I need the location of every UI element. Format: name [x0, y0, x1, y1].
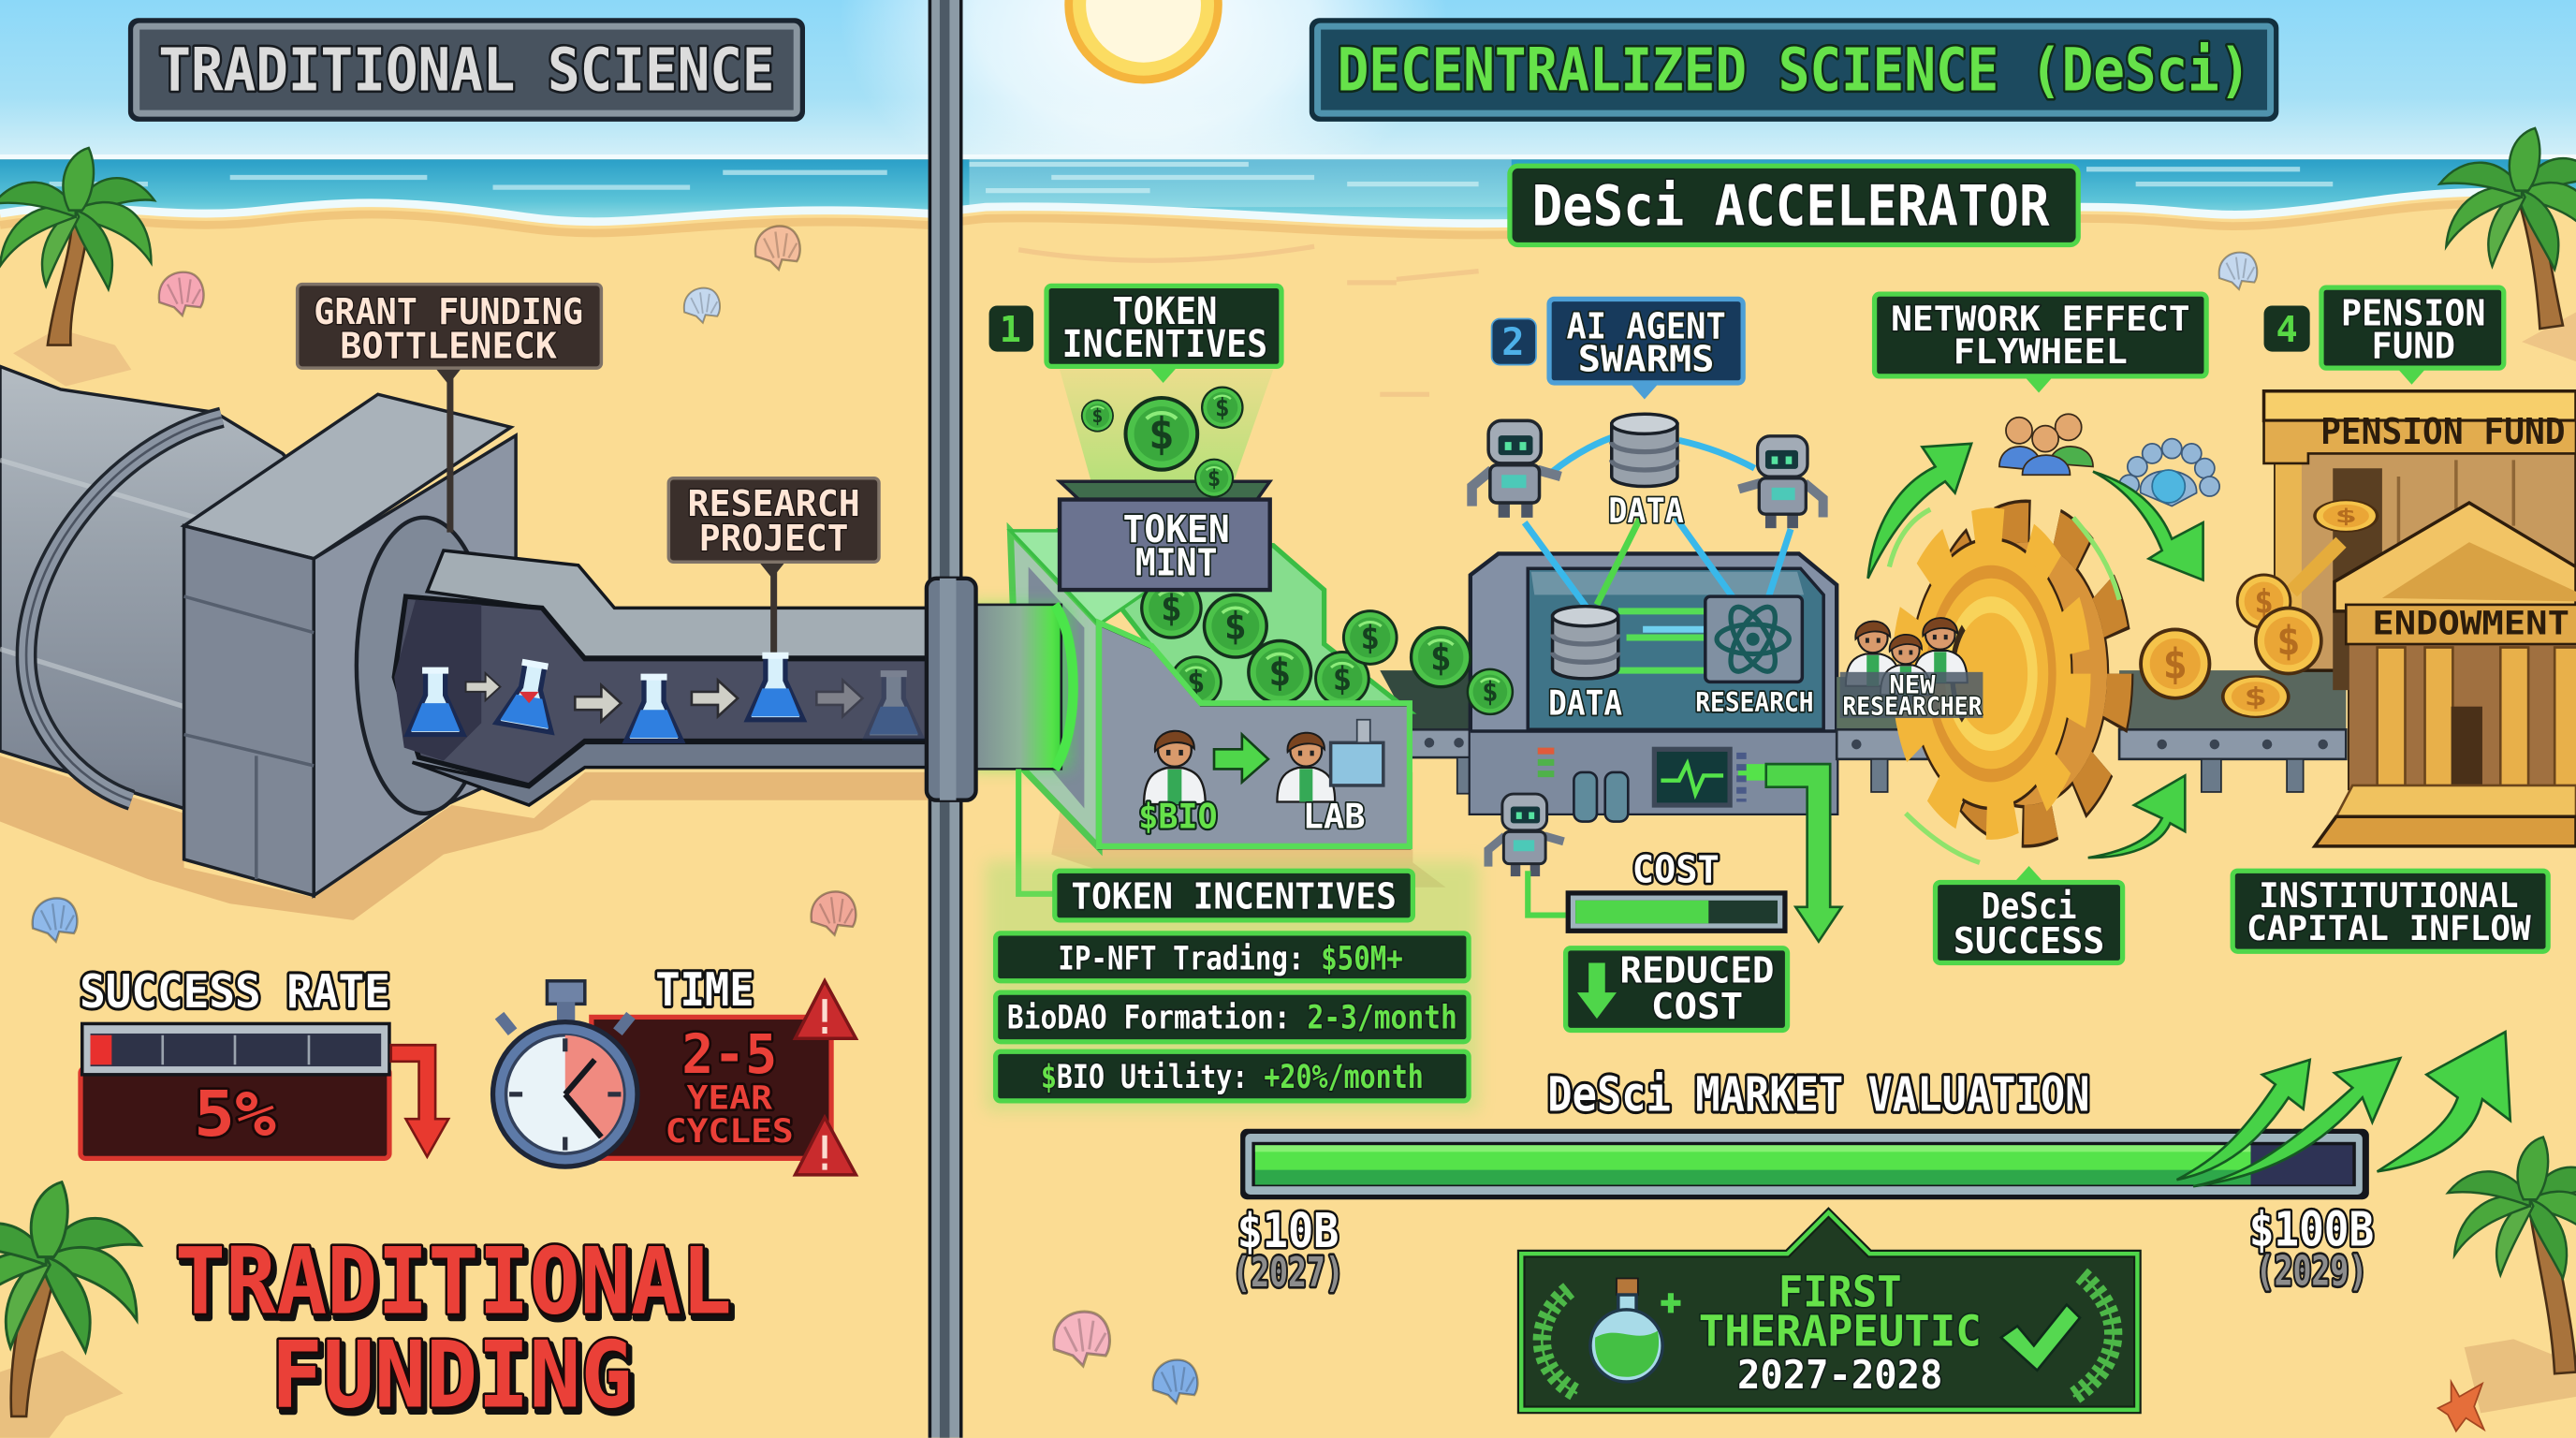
heading: Traditional Funding: FUNDING	[274, 1328, 636, 1434]
token incentives stats	[986, 861, 1479, 1110]
token mint machine	[1010, 531, 1410, 848]
endowment temple: ENDOWMENT	[2372, 604, 2569, 642]
palm tree: top left	[0, 148, 154, 345]
time metric: YEAR	[687, 1079, 773, 1118]
milestone: first therapeutic	[1521, 1212, 2137, 1410]
gold coins	[2139, 500, 2378, 718]
step 2: AI agent swarms: SWARMS	[1578, 339, 1714, 381]
label: DeSci success: DeSci	[1982, 886, 2076, 928]
label: grant funding bottleneck: GRANT FUNDING	[314, 291, 583, 333]
step 1: token incentives: TOKEN	[1112, 289, 1218, 333]
success rate metric: SUCCESS RATE	[80, 964, 390, 1019]
label: grant funding bottleneck	[298, 285, 601, 533]
pension fund building: PENSION FUND	[2320, 411, 2566, 453]
heading: Traditional Funding: TRADITIONAL	[178, 1234, 735, 1341]
new researchers group: RESEARCHER	[1842, 693, 1983, 721]
market valuation bar: DeSci MARKET VALUATION	[1547, 1067, 2089, 1123]
conveyor: AI lab through gear to endowment	[1837, 670, 2346, 792]
flywheel label	[1875, 294, 2206, 392]
label: research project	[668, 478, 879, 657]
bottleneck pipe	[0, 366, 944, 896]
stat: IP-NFT trading	[996, 933, 1469, 981]
step 4: pension fund	[2264, 287, 2504, 385]
token mint machine: LAB	[1303, 797, 1365, 837]
heading: Traditional Funding	[175, 1228, 735, 1434]
arrow: lab to reduced cost	[1766, 764, 1841, 942]
step 1: token incentives: 1	[1000, 309, 1021, 351]
icon: potion	[1590, 1278, 1680, 1382]
time metric: 2-5	[681, 1022, 777, 1086]
sun	[1064, 0, 1222, 84]
stat header: TOKEN INCENTIVES	[1071, 876, 1397, 918]
flywheel label: FLYWHEEL	[1954, 331, 2128, 372]
arrow: success rate falling	[391, 1045, 448, 1157]
cost metric: REDUCED	[1620, 950, 1775, 992]
step 1: token incentives	[989, 286, 1281, 487]
new researchers group	[1840, 618, 1983, 721]
panel title: Traditional Science: TRADITIONAL SCIENCE	[158, 36, 775, 105]
market valuation bar: $100B	[2249, 1202, 2374, 1257]
time metric	[493, 962, 856, 1175]
center divider	[929, 0, 962, 1438]
growth arrows	[2177, 1032, 2510, 1186]
label: grant funding bottleneck: BOTTLENECK	[340, 326, 558, 368]
icon: blue crowd network	[2119, 439, 2219, 506]
flywheel arrows	[1868, 444, 2203, 862]
cost metric: COST	[1632, 847, 1720, 891]
label: research project: RESEARCH	[688, 483, 860, 525]
network effect flywheel gear	[1902, 522, 2119, 825]
step 4: pension fund: FUND	[2371, 326, 2455, 368]
icon: laurels	[1542, 1275, 2114, 1397]
heading: Traditional Funding: FUNDING	[271, 1322, 633, 1429]
green pipe outlet	[927, 579, 1074, 894]
heading: Traditional Funding: TRADITIONAL	[175, 1228, 732, 1335]
market valuation bar: (2029)	[2256, 1247, 2367, 1295]
label: DeSci success: SUCCESS	[1954, 920, 2104, 962]
AI agent network links	[1525, 435, 1791, 608]
label: DeSci success	[1936, 866, 2123, 962]
data stores, research module and robots: RESEARCH	[1695, 687, 1814, 718]
cost metric	[1528, 764, 1841, 1030]
sand shadows	[0, 312, 2576, 1438]
panel title: Traditional Science	[128, 18, 805, 122]
time metric: CYCLES	[666, 1112, 794, 1151]
conveyor: mint to AI lab	[1380, 670, 1475, 794]
panel title: Decentralized Science	[1310, 18, 2278, 122]
flywheel label: NETWORK EFFECT	[1891, 299, 2190, 339]
cost metric: COST	[1651, 986, 1743, 1028]
token mint hopper: MINT	[1135, 540, 1218, 584]
milestone: first therapeutic: THERAPEUTIC	[1699, 1306, 1982, 1356]
success rate metric: 5%	[194, 1078, 276, 1151]
time metric: TIME	[655, 962, 754, 1017]
token mint hopper	[1060, 481, 1270, 590]
token mint hopper: TOKEN	[1123, 507, 1230, 551]
milestone: first therapeutic: 2027-2028	[1737, 1352, 1942, 1398]
token mint machine: $BIO	[1138, 797, 1218, 837]
palm tree: bottom right	[2448, 1137, 2576, 1373]
label: institutional capital inflow: INSTITUTIONAL	[2259, 875, 2519, 916]
heading: DeSci Accelerator: DeSci ACCELERATOR	[1532, 174, 2050, 239]
stat: IP-NFT trading: IP-NFT Trading: $50M+	[1058, 940, 1403, 978]
step 4: pension fund: PENSION	[2341, 293, 2485, 335]
stat: BioDAO formation: BioDAO Formation: 2-3/month	[1007, 999, 1457, 1037]
label: research project: PROJECT	[699, 518, 849, 560]
step 2: AI agent swarms	[1492, 299, 1743, 399]
step 4: pension fund: 4	[2276, 309, 2298, 351]
success rate metric	[80, 964, 448, 1158]
market valuation bar	[1232, 1032, 2510, 1297]
market valuation bar: (2027)	[1232, 1249, 1344, 1297]
milestone: first therapeutic: FIRST	[1778, 1267, 1902, 1316]
palm tree: top right	[2439, 128, 2576, 329]
icon: stopwatch	[493, 981, 637, 1167]
label: institutional capital inflow	[2232, 871, 2548, 951]
endowment temple	[2315, 503, 2576, 846]
icon: warning triangles	[795, 981, 856, 1175]
flying token coins	[1081, 386, 1514, 715]
pension fund building	[2264, 391, 2576, 788]
palm tree: bottom left	[0, 1182, 140, 1416]
step 2: AI agent swarms: AI AGENT	[1566, 306, 1726, 348]
research flasks and arrows in pipe	[407, 655, 922, 741]
panel title: Decentralized Science: DECENTRALIZED SCIENCE (DeSci)	[1338, 36, 2250, 105]
data stores, research module and robots: DATA	[1548, 682, 1622, 723]
stat: $BIO utility: $BIO Utility: +20%/month	[1041, 1058, 1424, 1096]
data stores, research module and robots	[1472, 414, 1823, 876]
icon: check mark	[2001, 1305, 2080, 1371]
seashells: left beach	[33, 227, 856, 942]
market valuation bar: $10B	[1237, 1204, 1339, 1259]
icon: community people	[1999, 414, 2093, 475]
data stores, research module and robots: DATA	[1608, 491, 1684, 531]
coins in hopper	[1140, 577, 1398, 708]
step 2: AI agent swarms: 2	[1501, 320, 1525, 364]
stat: $BIO utility	[996, 1051, 1469, 1101]
label: institutional capital inflow: CAPITAL INFLOW	[2247, 908, 2532, 948]
AI lab machine	[1471, 553, 1837, 822]
seashells and starfish: right beach	[1054, 253, 2484, 1431]
step 1: token incentives: INCENTIVES	[1062, 322, 1267, 366]
new researchers group: NEW	[1889, 672, 1936, 700]
